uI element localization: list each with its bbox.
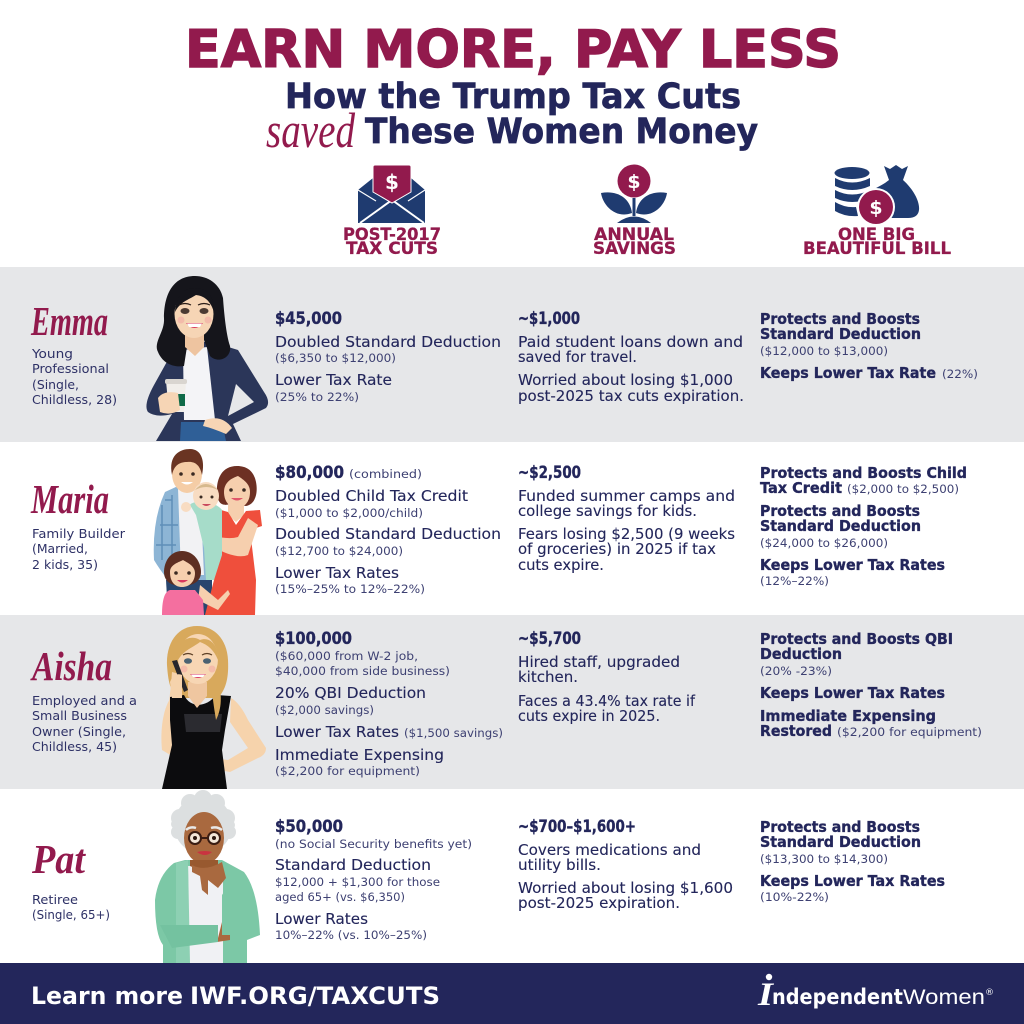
Maria: annual savings column: ~$2,500 [518, 463, 581, 482]
Emma: big beautiful bill column: (22%) [942, 367, 978, 381]
Aisha name and description: Aisha [30, 643, 112, 689]
column header: post-2017 tax cuts: POST-2017 [343, 225, 441, 244]
Aisha: tax cuts column: Lower Tax Rates [275, 723, 399, 741]
column header: annual savings: ANNUAL [594, 225, 675, 244]
Maria: big beautiful bill column: Protects and Boosts [760, 502, 920, 520]
Maria: big beautiful bill column: (12%–22%) [760, 574, 829, 588]
Emma: tax cuts column: Doubled Standard Deduction [275, 333, 501, 351]
illustration: Pat [155, 790, 260, 963]
panel: Emma [30, 276, 978, 441]
Maria name and description: Family Builder [32, 527, 126, 541]
Emma name and description: Emma [30, 298, 108, 344]
Emma: annual savings column [518, 309, 744, 405]
Maria: tax cuts column: Doubled Standard Deduction [275, 525, 501, 543]
panel: Aisha [30, 626, 982, 789]
Pat: annual savings column: Covers medications and [518, 841, 701, 859]
footer call to action: IWF.ORG/TAXCUTS [190, 982, 440, 1010]
Aisha: big beautiful bill column: (20% -23%) [760, 664, 832, 678]
Aisha: tax cuts column: ($2,000 savings) [275, 703, 374, 717]
Aisha: big beautiful bill column [760, 630, 982, 740]
Aisha: tax cuts column: ($60,000 from W-2 job, [275, 649, 418, 663]
Maria: tax cuts column: ($1,000 to $2,000/child) [275, 506, 423, 520]
column header: post-2017 tax cuts: TAX CUTS [346, 239, 438, 258]
icon: plant with coin [601, 164, 667, 223]
column header: annual savings: SAVINGS [593, 239, 676, 258]
Pat: big beautiful bill column: (10%-22%) [760, 890, 829, 904]
Emma: annual savings column: Worried about losing $1,000 [518, 371, 733, 389]
Maria: annual savings column: Fears losing $2,500 (9 weeks [518, 525, 735, 543]
Maria: tax cuts column: Doubled Child Tax Credit [275, 487, 468, 505]
Maria: annual savings column: college savings for kids. [518, 502, 697, 520]
Emma: annual savings column: post-2025 tax cuts expiration. [518, 387, 744, 405]
Maria: big beautiful bill column: ($2,000 to $2,500) [847, 482, 959, 496]
Pat name and description: Pat [31, 836, 86, 882]
Pat: tax cuts column: (no Social Security benefits yet) [275, 837, 472, 851]
Emma: tax cuts column [275, 309, 501, 404]
illustration: Maria's family [154, 449, 262, 615]
Aisha: big beautiful bill column: ($2,200 for equipment) [837, 725, 982, 739]
Maria: tax cuts column: (combined) [349, 467, 422, 481]
Maria: tax cuts column: (15%–25% to 12%–22%) [275, 582, 425, 596]
illustration: Emma [146, 276, 268, 441]
Aisha: annual savings column: Hired staff, upgraded [518, 653, 680, 671]
Pat: big beautiful bill column: Standard Deduction [760, 833, 921, 851]
Pat: annual savings column: post-2025 expiration. [518, 894, 680, 912]
Pat name and description [31, 836, 110, 922]
logo: Independent Women: ndependent [772, 985, 903, 1009]
Emma: big beautiful bill column: Standard Deduction [760, 325, 921, 343]
Maria: annual savings column: cuts expire. [518, 556, 604, 574]
Emma: annual savings column: Paid student loans down and [518, 333, 743, 351]
icon: coins and money bag: $ [869, 197, 883, 219]
Pat: big beautiful bill column: Protects and Boosts [760, 818, 920, 836]
Emma name and description: (Single, [32, 378, 79, 392]
Pat: tax cuts column: aged 65+ (vs. $6,350) [275, 890, 405, 904]
Pat: tax cuts column: $12,000 + $1,300 for those [275, 875, 440, 889]
Maria name and description [30, 476, 126, 572]
Aisha name and description: Small Business [32, 709, 127, 723]
Pat: annual savings column: ~$700–$1,600+ [518, 817, 636, 836]
footer call to action: Learn more [31, 982, 183, 1010]
Aisha: annual savings column: kitchen. [518, 668, 578, 686]
Maria name and description: Maria [30, 476, 109, 522]
Aisha: big beautiful bill column: Restored [760, 722, 832, 740]
Emma: tax cuts column: (25% to 22%) [275, 390, 359, 404]
Aisha name and description [30, 643, 137, 754]
Pat: tax cuts column: Standard Deduction [275, 856, 431, 874]
Pat: big beautiful bill column: Keeps Lower Tax Rates [760, 872, 945, 890]
column header: one big beautiful bill: ONE BIG [838, 225, 915, 244]
panel: Pat [31, 790, 945, 963]
logo: Independent Women: Women [903, 986, 985, 1009]
title: EARN MORE, PAY LESS [185, 20, 841, 80]
illustration: Aisha [161, 626, 266, 789]
Emma name and description: Young [31, 347, 73, 361]
Emma name and description: Professional [32, 362, 109, 376]
Maria: tax cuts column [275, 463, 501, 596]
Emma: big beautiful bill column: Keeps Lower Tax Rate [760, 364, 936, 382]
Aisha: big beautiful bill column: Immediate Expensing [760, 707, 936, 725]
Aisha: annual savings column: Faces a 43.4% tax rate if [518, 692, 696, 710]
Maria: big beautiful bill column: ($24,000 to $26,000) [760, 536, 888, 550]
column header: one big beautiful bill: BEAUTIFUL BILL [803, 239, 951, 258]
Aisha: tax cuts column: ($1,500 savings) [404, 726, 503, 740]
footer call to action [31, 982, 440, 1010]
Maria: big beautiful bill column: Protects and Boosts Child [760, 464, 967, 482]
Maria: annual savings column: of groceries) in 2025 if tax [518, 540, 716, 558]
icon: envelope with dollar [358, 165, 425, 223]
Aisha name and description: Childless, 45) [32, 740, 117, 754]
Pat: tax cuts column: 10%–22% (vs. 10%–25%) [275, 928, 427, 942]
Maria: big beautiful bill column: Tax Credit [760, 479, 842, 497]
Maria: tax cuts column: ($12,700 to $24,000) [275, 544, 403, 558]
Aisha: big beautiful bill column: Keeps Lower Tax Rates [760, 684, 945, 702]
Emma: tax cuts column: $45,000 [275, 309, 342, 328]
Maria: tax cuts column: $80,000 [275, 463, 344, 482]
subtitle: saved [266, 102, 356, 158]
Aisha: annual savings column: ~$5,700 [518, 629, 581, 648]
panel: Maria [30, 449, 967, 615]
Maria: big beautiful bill column: Keeps Lower Tax Rates [760, 556, 945, 574]
Pat: big beautiful bill column: ($13,300 to $14,300) [760, 852, 888, 866]
Pat: tax cuts column: Lower Rates [275, 910, 368, 928]
Maria name and description: (Married, [32, 542, 88, 556]
logo: Independent Women: ® [985, 988, 994, 998]
Emma: tax cuts column: Lower Tax Rate [275, 371, 392, 389]
Emma: annual savings column: ~$1,000 [518, 309, 580, 328]
icon: envelope with dollar: $ [385, 170, 399, 194]
Pat: tax cuts column [275, 817, 472, 942]
footer bar [0, 963, 1024, 1024]
Aisha: tax cuts column: ($2,200 for equipment) [275, 764, 420, 778]
Aisha: tax cuts column: $100,000 [275, 629, 352, 648]
column header: annual savings [593, 225, 676, 258]
logo: Independent Women: I [757, 977, 774, 1013]
subtitle [266, 77, 758, 158]
Pat: annual savings column [518, 817, 733, 912]
Aisha: annual savings column [518, 629, 696, 725]
Emma name and description [30, 298, 117, 407]
Emma: big beautiful bill column: Protects and Boosts [760, 310, 920, 328]
Maria: big beautiful bill column: Standard Deduction [760, 517, 921, 535]
Pat: tax cuts column: $50,000 [275, 817, 343, 836]
Aisha: big beautiful bill column: Deduction [760, 645, 842, 663]
Pat: annual savings column: Worried about losing $1,600 [518, 879, 733, 897]
Emma: annual savings column: saved for travel. [518, 348, 637, 366]
Emma: big beautiful bill column: ($12,000 to $13,000) [760, 344, 888, 358]
Aisha: tax cuts column: $40,000 from side business) [275, 664, 450, 678]
Maria: annual savings column: Funded summer camps and [518, 487, 735, 505]
Aisha: tax cuts column: Immediate Expensing [275, 746, 444, 764]
logo: Independent Women [757, 974, 994, 1013]
subtitle: How the Trump Tax Cuts [285, 77, 741, 117]
icon: plant with coin: $ [627, 171, 641, 193]
Maria: tax cuts column: Lower Tax Rates [275, 564, 399, 582]
Aisha: tax cuts column [275, 629, 503, 778]
Pat name and description: Retiree [32, 893, 78, 907]
Aisha: big beautiful bill column: Protects and Boosts QBI [760, 630, 953, 648]
Aisha name and description: Owner (Single, [32, 725, 126, 739]
Maria: annual savings column [518, 463, 735, 574]
subtitle: These Women Money [365, 112, 758, 152]
Maria name and description: 2 kids, 35) [32, 558, 98, 572]
Aisha: annual savings column: cuts expire in 2025. [518, 707, 660, 725]
Pat: big beautiful bill column [760, 818, 945, 904]
Emma: big beautiful bill column [760, 310, 978, 382]
Pat name and description: (Single, 65+) [32, 908, 110, 922]
Emma: tax cuts column: ($6,350 to $12,000) [275, 351, 396, 365]
Maria: big beautiful bill column [760, 464, 967, 588]
Aisha name and description: Employed and a [32, 694, 137, 708]
icon: coins and money bag [834, 165, 919, 226]
Aisha: tax cuts column: 20% QBI Deduction [275, 684, 426, 702]
column header: post-2017 tax cuts [343, 225, 441, 258]
column header: one big beautiful bill [803, 225, 951, 258]
Emma name and description: Childless, 28) [32, 393, 117, 407]
Pat: annual savings column: utility bills. [518, 856, 601, 874]
